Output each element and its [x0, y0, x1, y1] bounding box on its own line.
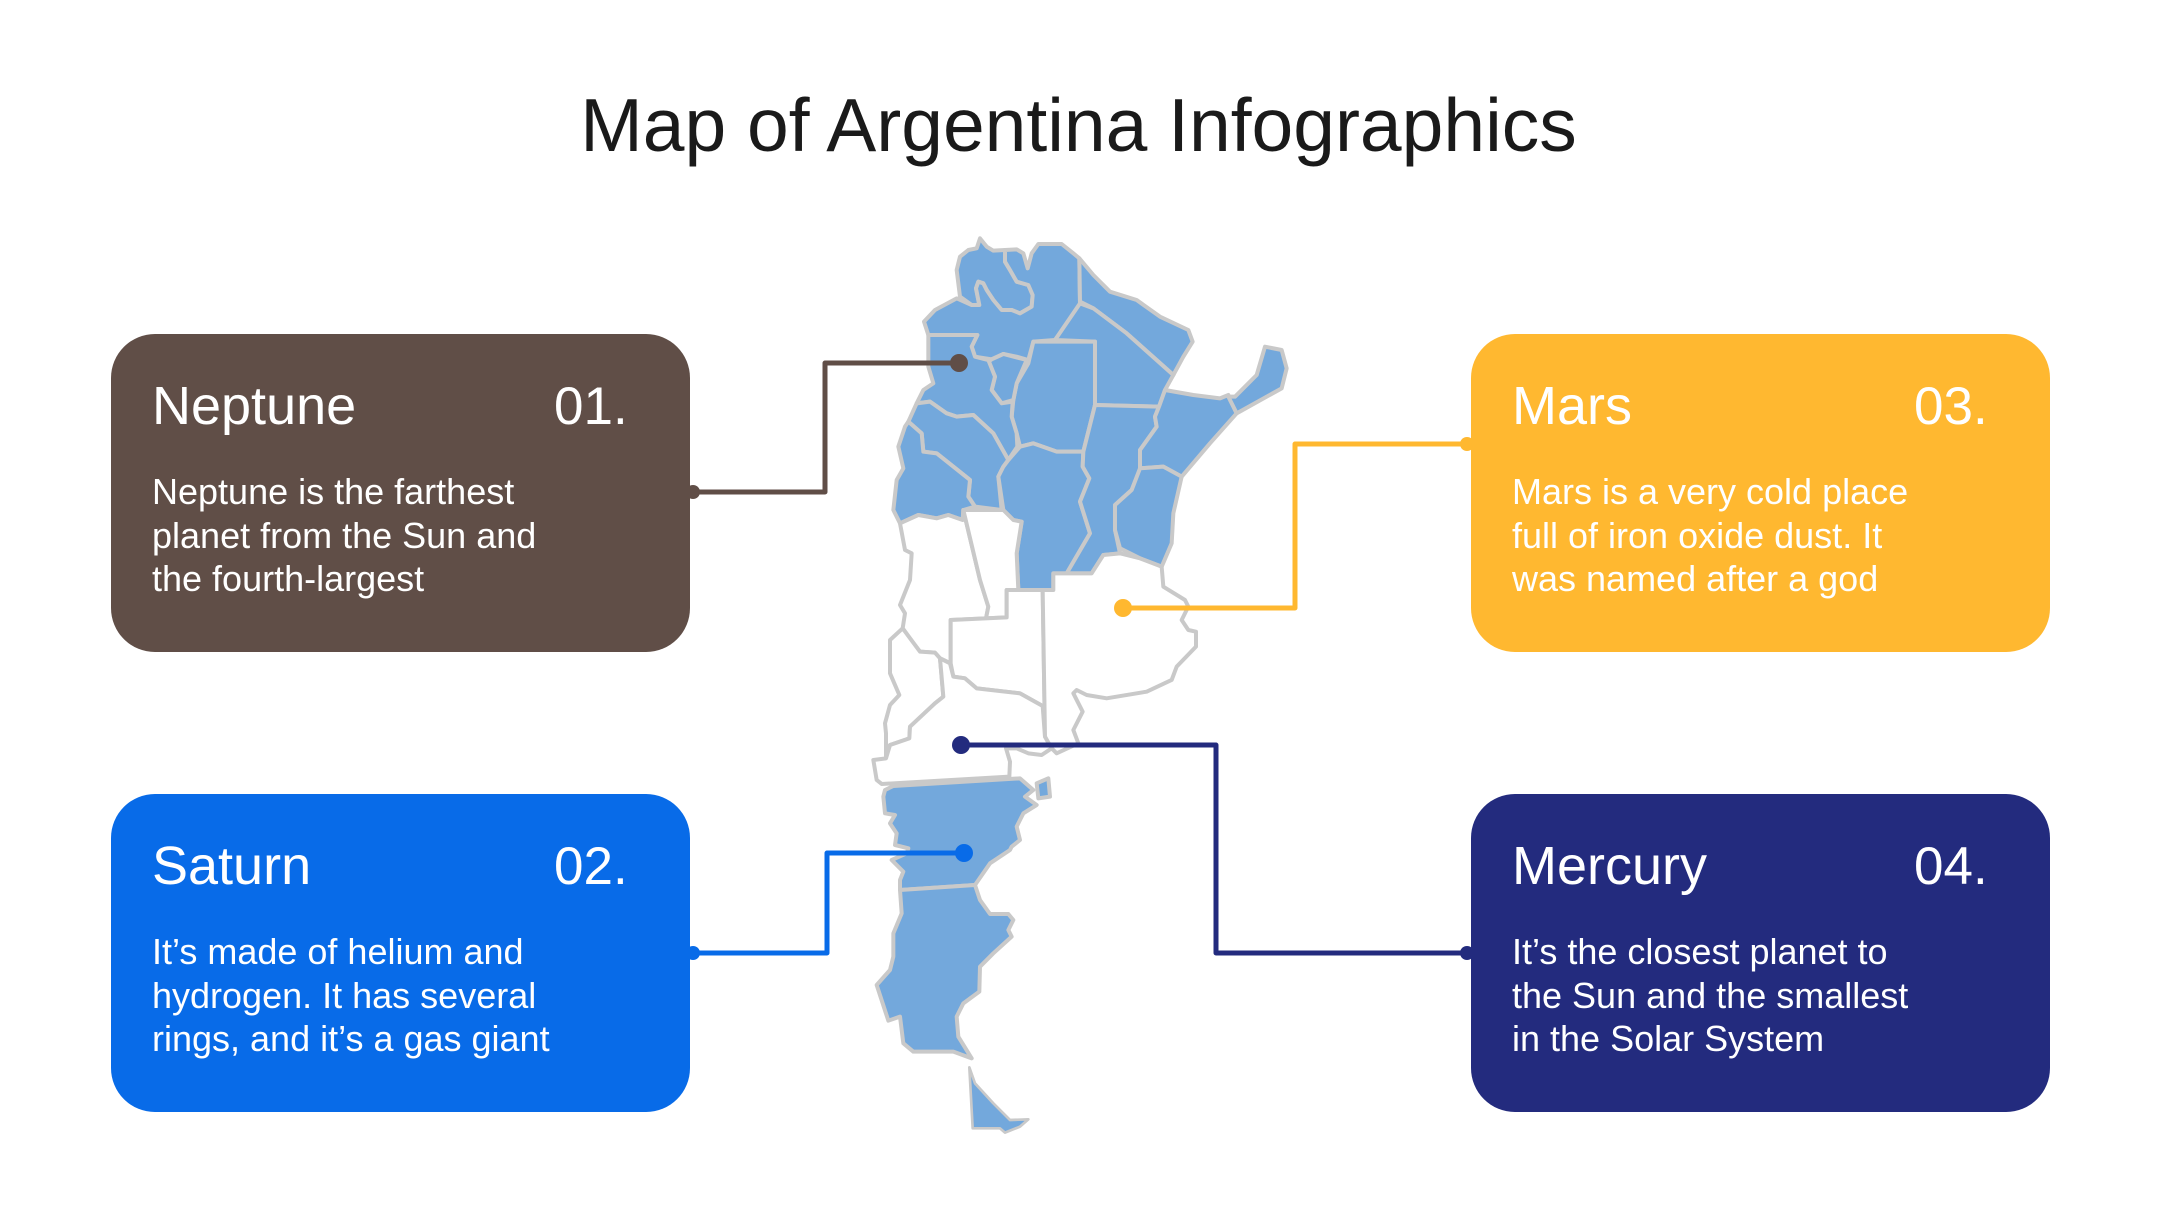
connector: Mars: [1114, 437, 1474, 617]
northern provinces, highlighted: [893, 238, 1287, 590]
panel: Neptune: 01.: [554, 377, 628, 436]
panel: Mercury: the Sun and the smallest: [1512, 975, 1908, 1016]
panel: Mars: Mars is a very cold place: [1512, 471, 1908, 512]
map of Argentina: [873, 238, 1287, 1133]
panel: Saturn: [111, 794, 690, 1112]
panel: Mercury: in the Solar System: [1512, 1018, 1824, 1059]
panel: Mars: 03.: [1914, 377, 1988, 436]
title: Map of Argentina Infographics: [580, 83, 1577, 167]
central provinces, unfilled: [873, 510, 1196, 784]
connector: Mercury: [952, 736, 1474, 960]
panel: Neptune: the fourth-largest: [152, 558, 424, 599]
panel: Neptune: Neptune is the farthest: [152, 471, 514, 512]
panel: Neptune: [111, 334, 690, 652]
panel: Saturn: It’s made of helium and: [152, 931, 524, 972]
panel: Saturn: hydrogen. It has several: [152, 975, 536, 1016]
panel: Saturn: rings, and it’s a gas giant: [152, 1018, 550, 1059]
panel: Mercury: Mercury: [1512, 836, 1707, 896]
panel: Mercury: [1471, 794, 2050, 1112]
panel: Mercury: 04.: [1914, 837, 1988, 896]
panel: Neptune: planet from the Sun and: [152, 515, 536, 556]
panel: Neptune: Neptune: [152, 376, 356, 436]
connector: Neptune: [686, 354, 968, 499]
panel: Mars: Mars: [1512, 376, 1632, 436]
southern provinces, highlighted: [877, 778, 1050, 1133]
panel: Mars: was named after a god: [1511, 558, 1878, 599]
panel: Mars: full of iron oxide dust. It: [1512, 515, 1882, 556]
panel: Mercury: It’s the closest planet to: [1512, 931, 1888, 972]
panel: Mars: [1471, 334, 2050, 652]
connector: Saturn: [686, 844, 973, 960]
panel: Saturn: 02.: [554, 837, 628, 896]
panel: Saturn: Saturn: [152, 836, 311, 896]
